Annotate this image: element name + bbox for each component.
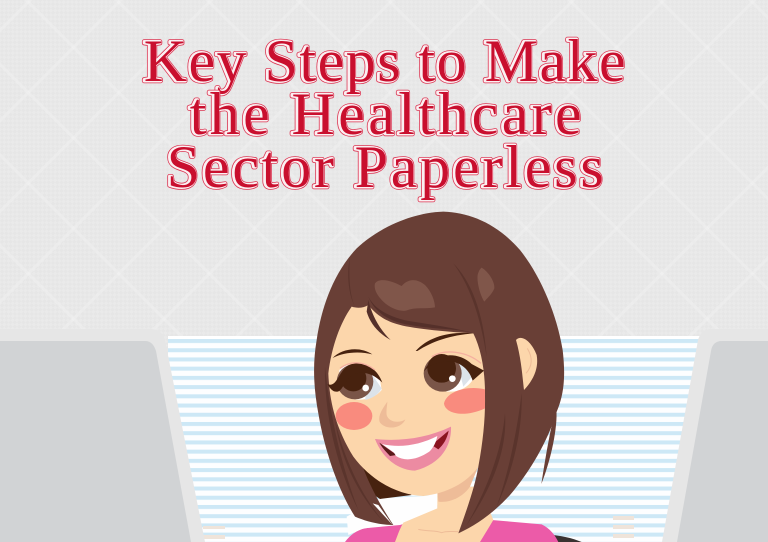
title line 2: the Healthcare (188, 81, 580, 147)
stray hair lock (541, 407, 557, 484)
hair highlight right (477, 268, 494, 302)
under-chin hair shadow (362, 467, 412, 499)
title line 1: Key Steps to Make (144, 28, 626, 94)
title line 3: Sector Paperless (166, 134, 602, 200)
character: smiling woman (314, 212, 582, 542)
striped window panel (168, 336, 700, 542)
right eyebrow (416, 333, 474, 351)
chair (545, 534, 582, 542)
collarbone (418, 529, 458, 533)
left eye (327, 363, 382, 400)
right monitor (662, 329, 768, 542)
collar (347, 495, 437, 535)
left eyebrow (333, 349, 372, 358)
title line 1: Key Steps to Make (142, 28, 624, 94)
hair (314, 212, 564, 533)
mouth (375, 427, 451, 471)
shirt (345, 520, 558, 542)
title line 1: Key Steps to Make (142, 28, 624, 94)
neck shadow (437, 467, 478, 502)
face (328, 305, 485, 496)
ear (516, 338, 537, 390)
hair highlight left (375, 280, 435, 311)
hair lock over forehead (367, 300, 391, 340)
title line 2: the Healthcare (190, 81, 582, 147)
title line 3: Sector Paperless (167, 134, 604, 200)
ear shadow (526, 348, 531, 373)
neck (395, 487, 493, 542)
hair strands (325, 257, 522, 525)
title line 2: the Healthcare (188, 81, 580, 147)
title line 3: Sector Paperless (166, 134, 602, 200)
right eye (424, 352, 484, 392)
nose (379, 402, 405, 428)
left cheek (336, 402, 372, 430)
right cheek (444, 388, 485, 414)
left monitor (0, 329, 205, 542)
title (142, 28, 626, 200)
bangs shadow (368, 297, 473, 333)
hair slit (373, 503, 393, 525)
